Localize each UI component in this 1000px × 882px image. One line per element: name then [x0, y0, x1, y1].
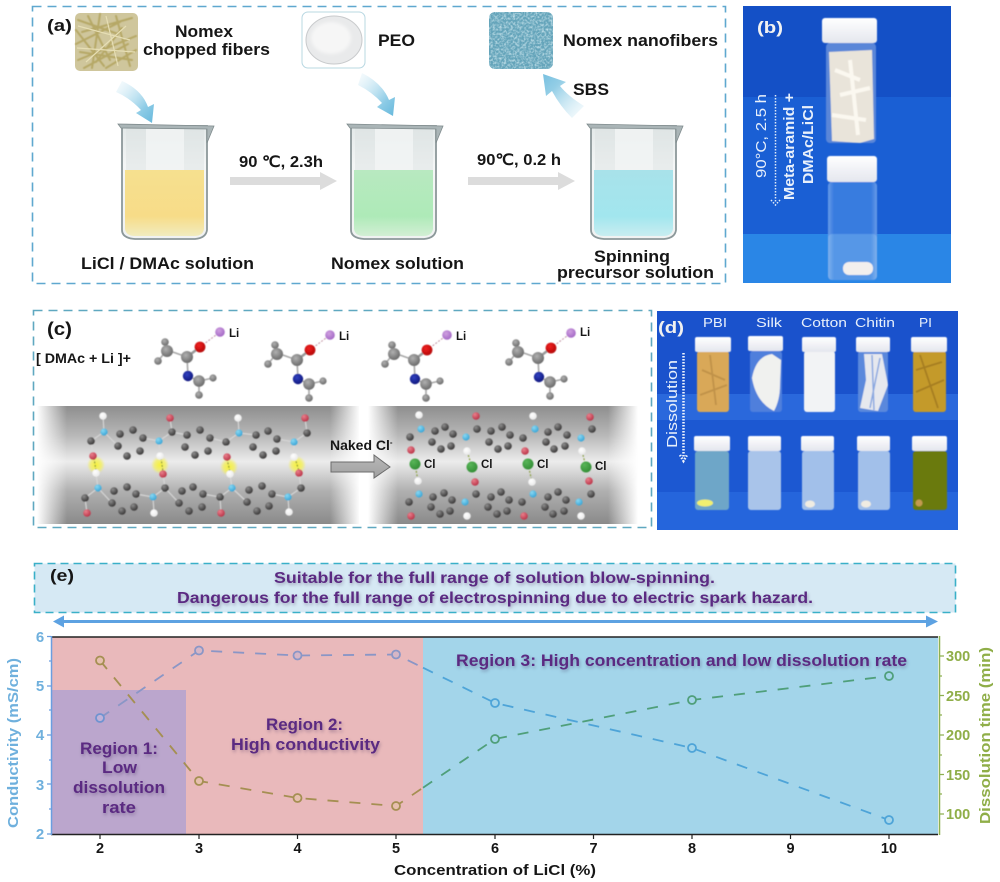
arrow: fibers into beaker — [116, 81, 154, 123]
x axis ticks: 3 — [195, 841, 203, 857]
panel (a): Nomex solution preparation process — [32, 6, 726, 284]
beaker: spinning precursor — [587, 124, 683, 239]
label: 90 °C 0.2 h: 90℃, 0.2 h — [477, 152, 561, 169]
x axis title: Concentration of LiCl (%) — [394, 863, 596, 879]
band: left polymer chains background — [37, 406, 360, 524]
label: PEO: PEO — [378, 32, 415, 50]
material labels: Cotton — [801, 315, 847, 330]
left polymer chains with hydrogen bonds — [81, 412, 311, 517]
Cl labels — [424, 459, 606, 473]
Cl labels: Cl — [481, 459, 492, 471]
x axis ticks: 9 — [786, 841, 795, 857]
label: Nomex chopped fibers: Nomex — [175, 23, 234, 41]
left axis ticks: 4 — [36, 727, 45, 744]
label: DMAc + Li complex: [ DMAc + Li ]+ — [36, 351, 131, 366]
vials: after dissolution — [694, 436, 947, 510]
panel (c): DMAc-Li and naked chloride mechanism — [34, 310, 652, 528]
double arrow across range — [53, 616, 938, 628]
right axis ticks — [946, 649, 970, 823]
vial: meta-aramid before — [822, 18, 877, 143]
region 2 label — [231, 716, 381, 754]
thumbnail: Nomex chopped fibers — [75, 13, 138, 71]
beaker: Nomex solution — [347, 124, 443, 239]
panel (e): conductivity and dissolution chart — [6, 564, 994, 879]
banner text: Dangerous for the full range of electrospinning due to electric spark hazard. — [177, 590, 813, 607]
label: Spinning precursor solution: Spinning — [594, 248, 670, 266]
x axis ticks: 2 — [96, 841, 104, 857]
Cl labels: Cl — [537, 459, 548, 471]
right axis ticks: 200 — [946, 728, 970, 744]
dotted arrow: dissolution — [680, 353, 687, 461]
conductivity series — [96, 646, 893, 824]
material labels: PI — [919, 315, 932, 330]
right axis title: Dissolution time (min) — [978, 647, 994, 824]
region 1 label: Low — [102, 759, 137, 777]
dotted arrow: dissolution direction — [771, 95, 780, 205]
right axis ticks: 300 — [946, 649, 970, 665]
label (b): (b) — [757, 18, 783, 37]
left axis ticks: 3 — [36, 777, 44, 794]
banner: suitability note — [34, 564, 956, 612]
label: Nomex solution: Nomex solution — [331, 255, 464, 273]
left axis ticks: 6 — [36, 629, 44, 646]
Li labels: Li — [339, 331, 349, 343]
Cl labels: Cl — [595, 461, 606, 473]
Li labels — [229, 327, 590, 343]
material labels: PBI — [703, 315, 727, 330]
right polymer chains with chloride ions — [405, 411, 596, 520]
label: Nomex chopped fibers: chopped fibers — [143, 41, 270, 59]
label (d): (d) — [658, 318, 684, 337]
plot frame and axes — [47, 636, 944, 839]
arrow: PEO into beaker — [358, 73, 395, 116]
x axis ticks: 5 — [392, 841, 400, 857]
region 1 label: rate — [102, 799, 136, 817]
plot regions — [52, 637, 938, 834]
label: Naked Cl-: - — [390, 438, 393, 447]
region 2 label: Region 2: — [266, 716, 343, 734]
label (a): (a) — [47, 16, 72, 35]
thumbnail: Nomex nanofibers — [489, 12, 553, 69]
Li labels: Li — [580, 327, 590, 339]
x axis ticks: 7 — [589, 841, 598, 857]
x axis ticks — [96, 841, 897, 857]
region 1 label — [73, 740, 165, 817]
panel (d): solubility of other polymers — [657, 311, 958, 530]
molecule 4 — [505, 328, 576, 400]
thumbnail: PEO powder dish — [302, 12, 365, 68]
right axis ticks: 150 — [946, 768, 970, 784]
arrow: Naked Cl- — [331, 455, 390, 478]
x axis ticks: 4 — [293, 841, 302, 857]
label: Dissolution: Dissolution — [664, 360, 681, 448]
left axis ticks — [36, 629, 45, 843]
panel (b): vial photograph — [743, 6, 951, 283]
label: Nomex nanofibers: Nomex nanofibers — [563, 32, 718, 50]
x axis ticks: 10 — [881, 841, 897, 857]
beaker: LiCl / DMAc — [118, 124, 214, 239]
vials: before dissolution — [695, 336, 947, 412]
right axis ticks: 250 — [946, 689, 970, 705]
material labels: Silk — [756, 315, 783, 330]
x axis ticks: 6 — [491, 841, 499, 857]
left axis title: Conductivity (mS/cm) — [6, 658, 22, 828]
process arrow 1 — [230, 172, 337, 190]
molecule 1 — [154, 327, 225, 399]
band: right polymer chains background — [368, 406, 638, 524]
label (e): (e) — [50, 566, 74, 585]
label: SBS: SBS — [573, 81, 609, 99]
molecule 2 — [264, 330, 335, 402]
x axis ticks: 8 — [688, 841, 696, 857]
region 1 label: dissolution — [73, 779, 165, 797]
material labels — [703, 315, 932, 330]
molecule 3 — [381, 330, 452, 402]
banner text — [177, 570, 813, 607]
label: 90 °C 2.3h: 90 ℃, 2.3h — [239, 154, 323, 171]
arrow: SBS to nanofibers — [543, 74, 584, 118]
Cl labels: Cl — [424, 459, 436, 471]
label: Meta-aramid +: Meta-aramid + — [782, 93, 798, 200]
label: DMAc/LiCl: DMAc/LiCl — [801, 105, 817, 184]
banner text: Suitable for the full range of solution blow-spinning. — [274, 570, 715, 587]
label (c): (c) — [47, 319, 72, 339]
left axis ticks: 2 — [36, 826, 44, 843]
dissolution time series — [96, 656, 893, 810]
label: 90 °C, 2.5 h: 90°C, 2.5 h — [754, 94, 770, 178]
region 1 label: Region 1: — [80, 740, 158, 758]
label: Spinning precursor solution: precursor solution — [557, 264, 714, 282]
material labels: Chitin — [855, 315, 895, 330]
label: Naked Cl-: Naked Cl — [330, 437, 390, 453]
region 2 label: High conductivity — [231, 736, 381, 754]
right axis ticks: 100 — [946, 807, 970, 823]
vial: clear solution after — [827, 156, 877, 280]
left axis ticks: 5 — [36, 678, 44, 695]
process arrow 2 — [468, 172, 575, 190]
Li labels: Li — [456, 331, 466, 343]
label: LiCl / DMAc solution: LiCl / DMAc solution — [81, 255, 254, 273]
region 3 label: Region 3: High concentration and low dissolution rate — [456, 652, 907, 670]
Li labels: Li — [229, 328, 239, 340]
